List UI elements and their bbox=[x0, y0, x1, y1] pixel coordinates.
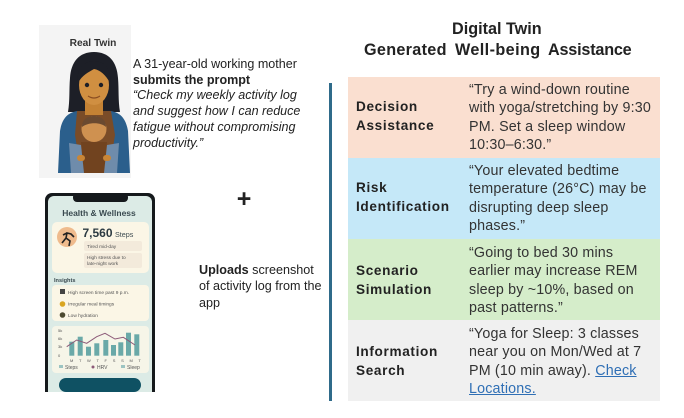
weekly chart: 6k bbox=[58, 336, 62, 341]
insights: Low hydration bbox=[68, 313, 98, 319]
button bbox=[59, 378, 141, 392]
panel: scenario simulation: Simulation bbox=[356, 282, 432, 296]
divider bar bbox=[328, 83, 332, 401]
text block: prompt bbox=[132, 57, 300, 150]
insights: Irregular meal timings bbox=[68, 302, 115, 308]
screen heading: Health & Wellness bbox=[62, 208, 136, 218]
panel: decision assistance: with yoga/stretching by 9:30 bbox=[469, 100, 651, 116]
panel: scenario simulation: “Going to bed 30 mins bbox=[469, 245, 613, 261]
panel: decision assistance: 10:30–6:30.” bbox=[469, 137, 551, 153]
phone screenshot bbox=[45, 193, 155, 392]
title: Generated bbox=[364, 41, 447, 59]
text block: prompt: A 31-year-old working mother bbox=[133, 57, 297, 71]
insights: Insights bbox=[54, 278, 75, 284]
panel: information search: Locations. bbox=[469, 381, 536, 397]
text block: uploads: Uploads screenshot bbox=[199, 263, 314, 277]
weekly chart: Sleep bbox=[127, 365, 140, 371]
panel: scenario simulation bbox=[348, 239, 660, 320]
panel: information search: “Yoga for Sleep: 3 classes bbox=[469, 326, 639, 342]
insights bbox=[52, 278, 149, 321]
panel: decision assistance: Decision bbox=[356, 99, 418, 114]
weekly chart: Steps bbox=[65, 365, 78, 371]
text block: prompt: and suggest how I can reduce bbox=[133, 104, 300, 118]
panel: risk identification: phases.” bbox=[469, 218, 525, 234]
steps card bbox=[52, 222, 149, 273]
weekly chart bbox=[52, 326, 149, 373]
panel: risk identification: temperature (26°C) may be bbox=[469, 181, 647, 197]
panel: real twin portrait bbox=[39, 25, 131, 178]
panel: scenario simulation: past patterns.” bbox=[469, 300, 563, 316]
text block: uploads: app bbox=[199, 296, 220, 310]
text block: uploads bbox=[199, 263, 322, 310]
plus sign: + bbox=[237, 185, 251, 213]
weekly chart: 0 bbox=[58, 353, 61, 358]
text block: prompt: submits the prompt bbox=[133, 73, 250, 87]
steps card: Steps bbox=[115, 230, 134, 239]
panel: information search: Search bbox=[356, 362, 405, 378]
panel: information search bbox=[348, 320, 660, 401]
label: real twin: Real Twin bbox=[70, 38, 116, 49]
text block: prompt: fatigue without compromising bbox=[133, 120, 296, 134]
text block: uploads: of activity log from the bbox=[199, 279, 322, 293]
steps card: late-night work bbox=[87, 261, 119, 267]
panel: information search: PM (10 min away). Check bbox=[469, 363, 637, 379]
weekly chart: 5k bbox=[58, 328, 62, 333]
panel: scenario simulation: Scenario bbox=[356, 263, 419, 278]
panel: decision assistance: Assistance bbox=[356, 118, 434, 132]
weekly chart: M T W T F S S M T bbox=[70, 358, 141, 363]
text block: prompt: productivity.” bbox=[133, 136, 203, 150]
steps card: Tired mid-day bbox=[87, 244, 117, 250]
panel: decision assistance: “Try a wind-down routine bbox=[469, 82, 630, 98]
panel: information search: near you on Mon/Wed at 7 bbox=[469, 344, 641, 360]
panel: scenario simulation: sleep by ~10%, based on bbox=[469, 282, 634, 298]
title: Well-being bbox=[455, 41, 541, 59]
title: Assistance bbox=[548, 41, 631, 59]
steps card: 7,560 bbox=[82, 226, 113, 240]
steps card: High stress due to bbox=[87, 255, 126, 261]
text block: prompt: “Check my weekly activity log bbox=[133, 88, 297, 102]
panel: decision assistance: PM. Set a sleep window bbox=[469, 119, 625, 135]
weekly chart: HRV bbox=[97, 365, 108, 371]
panel: risk identification bbox=[348, 158, 660, 239]
insights: High screen time past 9 p.m. bbox=[68, 290, 129, 296]
panel: risk identification: disrupting deep sleep bbox=[469, 200, 608, 216]
title: Digital Twin bbox=[452, 20, 542, 38]
title bbox=[364, 20, 632, 59]
panel: decision assistance bbox=[348, 77, 660, 158]
panel: risk identification: “Your elevated bedtime bbox=[469, 163, 619, 179]
panel: risk identification: Identification bbox=[356, 198, 450, 214]
panel: risk identification: Risk bbox=[356, 180, 387, 195]
weekly chart: 3k bbox=[58, 344, 62, 349]
panel: information search: Information bbox=[356, 344, 438, 359]
icon: mother and baby bbox=[58, 52, 130, 173]
panel: scenario simulation: earlier may increase REM bbox=[469, 263, 638, 279]
